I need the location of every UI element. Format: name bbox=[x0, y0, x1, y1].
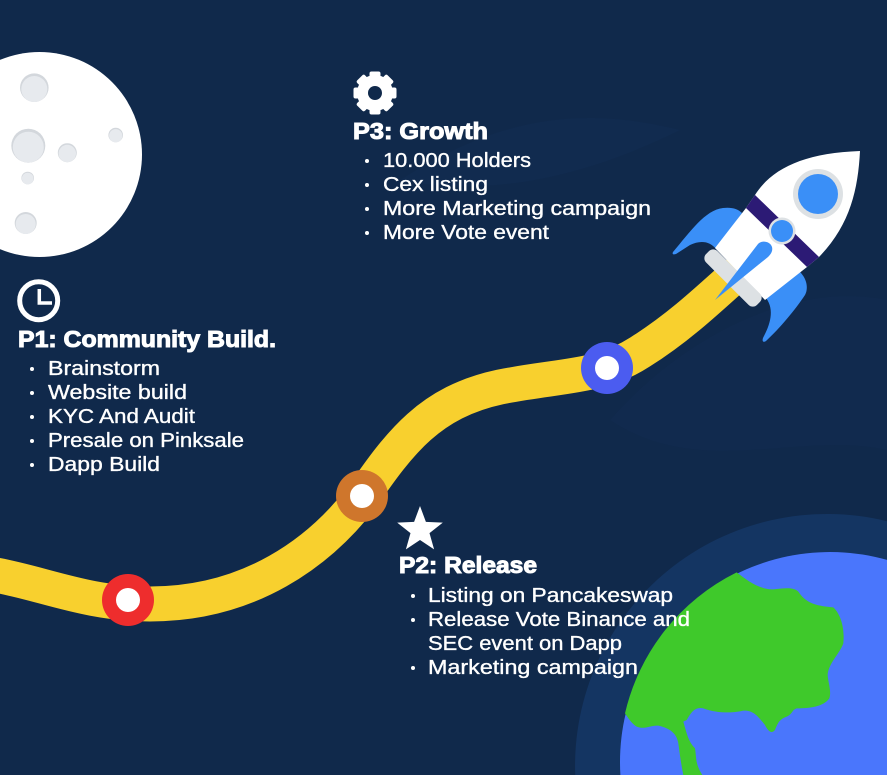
rocket right fin bbox=[763, 272, 807, 342]
rocket flame stripe bbox=[715, 242, 772, 300]
P2 list: Marketing campaign bbox=[428, 657, 638, 679]
rocket large window bbox=[793, 169, 843, 219]
earth halo bbox=[575, 514, 887, 775]
rocket small window bbox=[768, 218, 796, 244]
rocket band bbox=[746, 195, 819, 267]
P3 heading: P3: Growth bbox=[353, 118, 488, 144]
rocket base bbox=[702, 247, 764, 309]
P3 list: 10.000 Holders bbox=[383, 150, 531, 172]
icon: star bbox=[397, 506, 443, 549]
P1 list: Brainstorm bbox=[48, 358, 160, 380]
icon: clock bbox=[20, 282, 58, 320]
marker: P2 orange bbox=[336, 470, 388, 522]
P1 list: KYC And Audit bbox=[48, 406, 195, 428]
P3 list: More Marketing campaign bbox=[383, 198, 651, 220]
moon craters bbox=[11, 73, 123, 234]
icon: gear bbox=[354, 72, 396, 114]
earth continent bbox=[625, 572, 844, 775]
rocket body bbox=[715, 151, 860, 300]
P2 list bbox=[411, 585, 690, 679]
yellow roadmap path bbox=[0, 262, 750, 604]
P1 list: Dapp Build bbox=[48, 454, 160, 476]
P2 list: SEC event on Dapp bbox=[428, 633, 622, 655]
marker: P1 red bbox=[102, 574, 154, 626]
rocket left fin bbox=[673, 208, 742, 254]
P2 heading: P2: Release bbox=[399, 552, 537, 578]
earth bbox=[575, 514, 887, 775]
marker: P3 blue bbox=[581, 342, 633, 394]
moon bbox=[0, 52, 142, 257]
earth globe bbox=[620, 552, 887, 775]
P3 list bbox=[365, 150, 651, 244]
P1 list: Website build bbox=[48, 382, 187, 404]
P3 list: More Vote event bbox=[383, 222, 549, 244]
P2 list: Listing on Pancakeswap bbox=[428, 585, 673, 607]
P2 list: Release Vote Binance and bbox=[428, 609, 690, 631]
P3 list: Cex listing bbox=[383, 174, 488, 196]
P1 list bbox=[30, 358, 244, 476]
P1 list: Presale on Pinksale bbox=[48, 430, 244, 452]
rocket bbox=[673, 151, 860, 342]
P1 heading: P1: Community Build. bbox=[18, 326, 276, 352]
